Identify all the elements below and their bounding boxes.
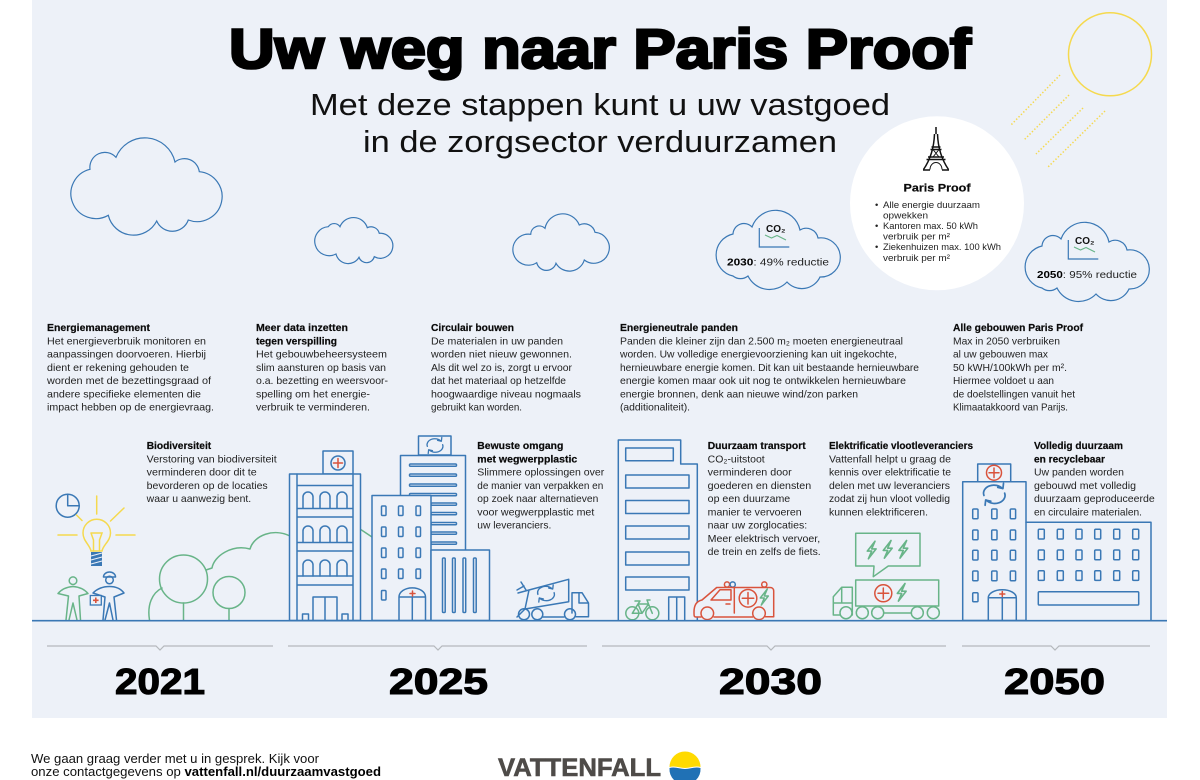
panel: Paris Proof circle: Alle energie duurzaam xyxy=(883,199,980,210)
panel: Paris Proof circle: • xyxy=(875,241,878,252)
text block: Meer data inzetten: Het gebouwbeheersysteem xyxy=(256,350,387,360)
text block: Energieneutrale panden: Panden die kleiner zijn dan 2.500 m₂ moeten energieneutraal xyxy=(620,336,903,347)
text block: Energieneutrale panden: worden. Uw volledige energievoorziening kan uit ingekochte, xyxy=(619,350,897,360)
panel: Paris Proof circle: Ziekenhuizen max. 100 kWh xyxy=(883,241,1001,252)
text block: Bewuste omgang: uw leveranciers. xyxy=(477,520,551,532)
text block: Biodiversiteit: Verstoring van biodiversiteit xyxy=(147,454,277,465)
text block: Circulair bouwen: worden niet nieuw gewonnen. xyxy=(430,350,572,360)
callout: CO2 2050 cloud: CO₂ xyxy=(1075,236,1094,247)
panel: Paris Proof circle: verbruik per m² xyxy=(883,230,950,242)
text block: Duurzaam transport: naar uw zorglocaties: xyxy=(708,520,807,532)
icon: Eiffel tower xyxy=(923,127,949,170)
icon: sun with rays xyxy=(1010,13,1152,167)
text block: Meer data inzetten: spelling om het energie- xyxy=(256,389,370,400)
text block: Alle gebouwen Paris Proof: de doelstellingen vanuit het xyxy=(953,389,1075,400)
text block: Energiemanagement xyxy=(46,323,214,414)
text block: Volledig duurzaam: en recyclebaar xyxy=(1034,454,1105,465)
text block: Volledig duurzaam: en circulaire materialen. xyxy=(1034,507,1142,518)
text block: Bewuste omgang xyxy=(477,441,605,532)
callout: CO2 2030 cloud: CO₂ xyxy=(766,224,785,235)
text block: Meer data inzetten: verbruik te verminderen. xyxy=(256,402,370,414)
building: office 2030 xyxy=(618,440,697,620)
text block: Energiemanagement: worden met de bezettingsgraad of xyxy=(46,376,211,387)
building: hospital front with arch door xyxy=(372,496,431,620)
text block: Elektrificatie vlootleveranciers: Elektrificatie vlootleveranciers xyxy=(829,441,973,452)
text block: Duurzaam transport: verminderen door xyxy=(708,468,792,478)
icon: lightbulb with pie clock xyxy=(56,494,135,566)
text block: Energieneutrale panden: energie bronnen, denk aan nieuwe wind/zon parken xyxy=(620,389,858,400)
text block: Alle gebouwen Paris Proof: Hiermee voldoet u aan xyxy=(953,376,1054,387)
text block: Bewuste omgang: op zoek naar alternatieven xyxy=(477,494,599,505)
panel: Paris Proof circle: • xyxy=(875,199,878,210)
text block: Biodiversiteit: Biodiversiteit xyxy=(147,441,212,452)
text block: Circulair bouwen: Als dit wel zo is, zorgt u ervoor xyxy=(431,363,573,374)
text block: Bewuste omgang: voor wegwerpplastic met xyxy=(477,507,594,518)
text block: Alle gebouwen Paris Proof: 50 kWH/100kWh per m². xyxy=(953,363,1067,374)
icon: ambulance xyxy=(694,582,774,620)
text block: Circulair bouwen xyxy=(430,323,581,414)
subtitle xyxy=(310,87,890,159)
text block: Volledig duurzaam: Volledig duurzaam xyxy=(1034,441,1123,452)
text block: Elektrificatie vlootleveranciers: zodat zij hun vloot volledig xyxy=(829,494,950,505)
text block: Alle gebouwen Paris Proof: Max in 2050 verbruiken xyxy=(953,336,1060,347)
text block: Elektrificatie vlootleveranciers: kunnen elektrificeren. xyxy=(829,507,928,518)
building: low block with vertical slats xyxy=(431,550,490,620)
text block: Elektrificatie vlootleveranciers: Vattenfall helpt u graag de xyxy=(829,454,951,465)
text block: Duurzaam transport: op een duurzame xyxy=(708,494,790,505)
text block: Biodiversiteit: waar u aanwezig bent. xyxy=(146,494,251,505)
cloud: medium xyxy=(513,214,609,271)
text block: Circulair bouwen: De materialen in uw panden xyxy=(431,336,563,347)
text block: Energiemanagement: aanpassingen doorvoeren. Hierbij xyxy=(47,350,206,360)
cloud: large xyxy=(71,138,222,235)
text block: Meer data inzetten: Meer data inzetten xyxy=(256,323,348,334)
text block: Meer data inzetten: o.a. bezetting en weersvoor- xyxy=(256,376,388,387)
text block: Volledig duurzaam: gebouwd met volledig xyxy=(1034,481,1136,492)
building: hospital 2025 left xyxy=(290,451,360,620)
icon: electric truck with speech bubble xyxy=(833,533,939,619)
text block: Energieneutrale panden: (additionaliteit). xyxy=(620,402,690,414)
text block: Elektrificatie vlootleveranciers xyxy=(829,441,973,518)
panel: Paris Proof circle: • xyxy=(875,220,878,231)
text block: Bewuste omgang: met wegwerpplastic xyxy=(477,454,578,465)
panel: Paris Proof circle: verbruik per m² xyxy=(883,252,950,263)
text block: Meer data inzetten: tegen verspilling xyxy=(256,336,337,347)
text block: Alle gebouwen Paris Proof xyxy=(953,323,1084,414)
text block: Biodiversiteit: verminderen door dit te xyxy=(147,468,257,478)
text block: Energiemanagement: Energiemanagement xyxy=(47,323,151,334)
text block: Biodiversiteit: bevorderen op de locaties xyxy=(147,481,268,492)
panel: Paris Proof circle: opwekken xyxy=(883,210,928,220)
text block: Volledig duurzaam xyxy=(1034,441,1155,518)
text block: Energiemanagement: impact hebben op de energievraag. xyxy=(47,402,214,414)
icon: green trees xyxy=(149,529,372,620)
text block: Duurzaam transport xyxy=(708,441,821,558)
text block: Volledig duurzaam: duurzaam geproduceerde xyxy=(1034,494,1155,505)
text block: Duurzaam transport: CO₂-uitstoot xyxy=(708,454,765,465)
text block: Circulair bouwen: gebruikt kan worden. xyxy=(431,402,522,414)
text block: Elektrificatie vlootleveranciers: kennis over elektrificatie te xyxy=(829,468,951,478)
subtitle: Met deze stappen kunt u uw vastgoed xyxy=(310,87,890,122)
text block: Volledig duurzaam: Uw panden worden xyxy=(1034,468,1124,478)
year 2050: 2050 xyxy=(1004,661,1105,702)
building: hospital tower 2050 xyxy=(963,464,1026,620)
text block: Alle gebouwen Paris Proof: Klimaatakkoord van Parijs. xyxy=(953,402,1068,414)
text block: Biodiversiteit xyxy=(146,441,277,505)
icon: bicycle xyxy=(626,600,659,620)
title: Uw weg naar Paris Proof xyxy=(229,17,971,80)
callout: CO2 2050 cloud: 2050 : 95% reductie xyxy=(1037,270,1137,281)
text block: Energieneutrale panden xyxy=(619,323,919,414)
icon: two people with medical case xyxy=(58,572,124,620)
text block: Circulair bouwen: Circulair bouwen xyxy=(431,323,514,334)
text block: Duurzaam transport: goederen en diensten xyxy=(708,481,811,492)
callout: CO2 2030 cloud: 2030 : 49% reductie xyxy=(727,258,829,268)
panel: Paris Proof circle xyxy=(850,116,1024,290)
text block: Circulair bouwen: dat het materiaal op hetzelfde xyxy=(431,376,566,387)
text block: Meer data inzetten: slim aansturen op basis van xyxy=(256,363,386,374)
text block: Elektrificatie vlootleveranciers: delen met uw leveranciers xyxy=(829,481,950,492)
panel: Paris Proof circle: Paris Proof xyxy=(904,182,971,194)
text block: Energiemanagement: dient er rekening gehouden te xyxy=(47,363,189,374)
callout: CO2 2050 cloud xyxy=(1025,222,1149,301)
footer contact text xyxy=(31,752,381,779)
panel: Paris Proof circle: Kantoren max. 50 kWh xyxy=(883,220,978,231)
building: wing 2050 xyxy=(1026,522,1151,620)
text block: Bewuste omgang: de manier van verpakken en xyxy=(477,481,604,492)
text block: Energieneutrale panden: energie komen maar ook uit nog te ontwikkelen hernieuwbare xyxy=(620,376,906,387)
text block: Circulair bouwen: hoogwaardige niveau nogmaals xyxy=(431,389,581,400)
text block: Duurzaam transport: de trein en zelfs de fiets. xyxy=(708,547,821,558)
footer contact text: We gaan graag verder met u in gesprek. Kijk voor xyxy=(31,752,319,766)
cloud: small xyxy=(315,218,393,264)
text block: Bewuste omgang: Slimmere oplossingen over xyxy=(477,468,605,478)
callout: CO2 2030 cloud xyxy=(716,210,840,289)
year 2030: 2030 xyxy=(719,661,822,702)
icon: recycling truck xyxy=(517,579,588,620)
text block: Duurzaam transport: Meer elektrisch vervoer, xyxy=(708,534,820,545)
footer contact text: onze contactgegevens op vattenfall.nl/duurzaamvastgoed xyxy=(31,765,381,779)
building: office tower with slats xyxy=(400,436,466,550)
text block: Energieneutrale panden: hernieuwbare energie komen. Dit kan uit bestaande hernieuwbare xyxy=(620,363,919,374)
text block: Meer data inzetten xyxy=(256,323,388,414)
text block: Energieneutrale panden: Energieneutrale panden xyxy=(620,323,738,334)
text block: Energiemanagement: andere specifieke elementen die xyxy=(47,389,201,400)
text block: Alle gebouwen Paris Proof: al uw gebouwen max xyxy=(953,350,1049,360)
text block: Bewuste omgang: Bewuste omgang xyxy=(477,441,563,452)
text block: Energiemanagement: Het energieverbruik monitoren en xyxy=(47,336,206,347)
text block: Alle gebouwen Paris Proof: Alle gebouwen Paris Proof xyxy=(953,323,1084,334)
year 2021: 2021 xyxy=(115,661,205,702)
text block: Duurzaam transport: Duurzaam transport xyxy=(708,441,806,452)
year 2025: 2025 xyxy=(389,661,488,702)
text block: Duurzaam transport: manier te vervoeren xyxy=(708,507,802,518)
subtitle: in de zorgsector verduurzamen xyxy=(363,124,837,159)
